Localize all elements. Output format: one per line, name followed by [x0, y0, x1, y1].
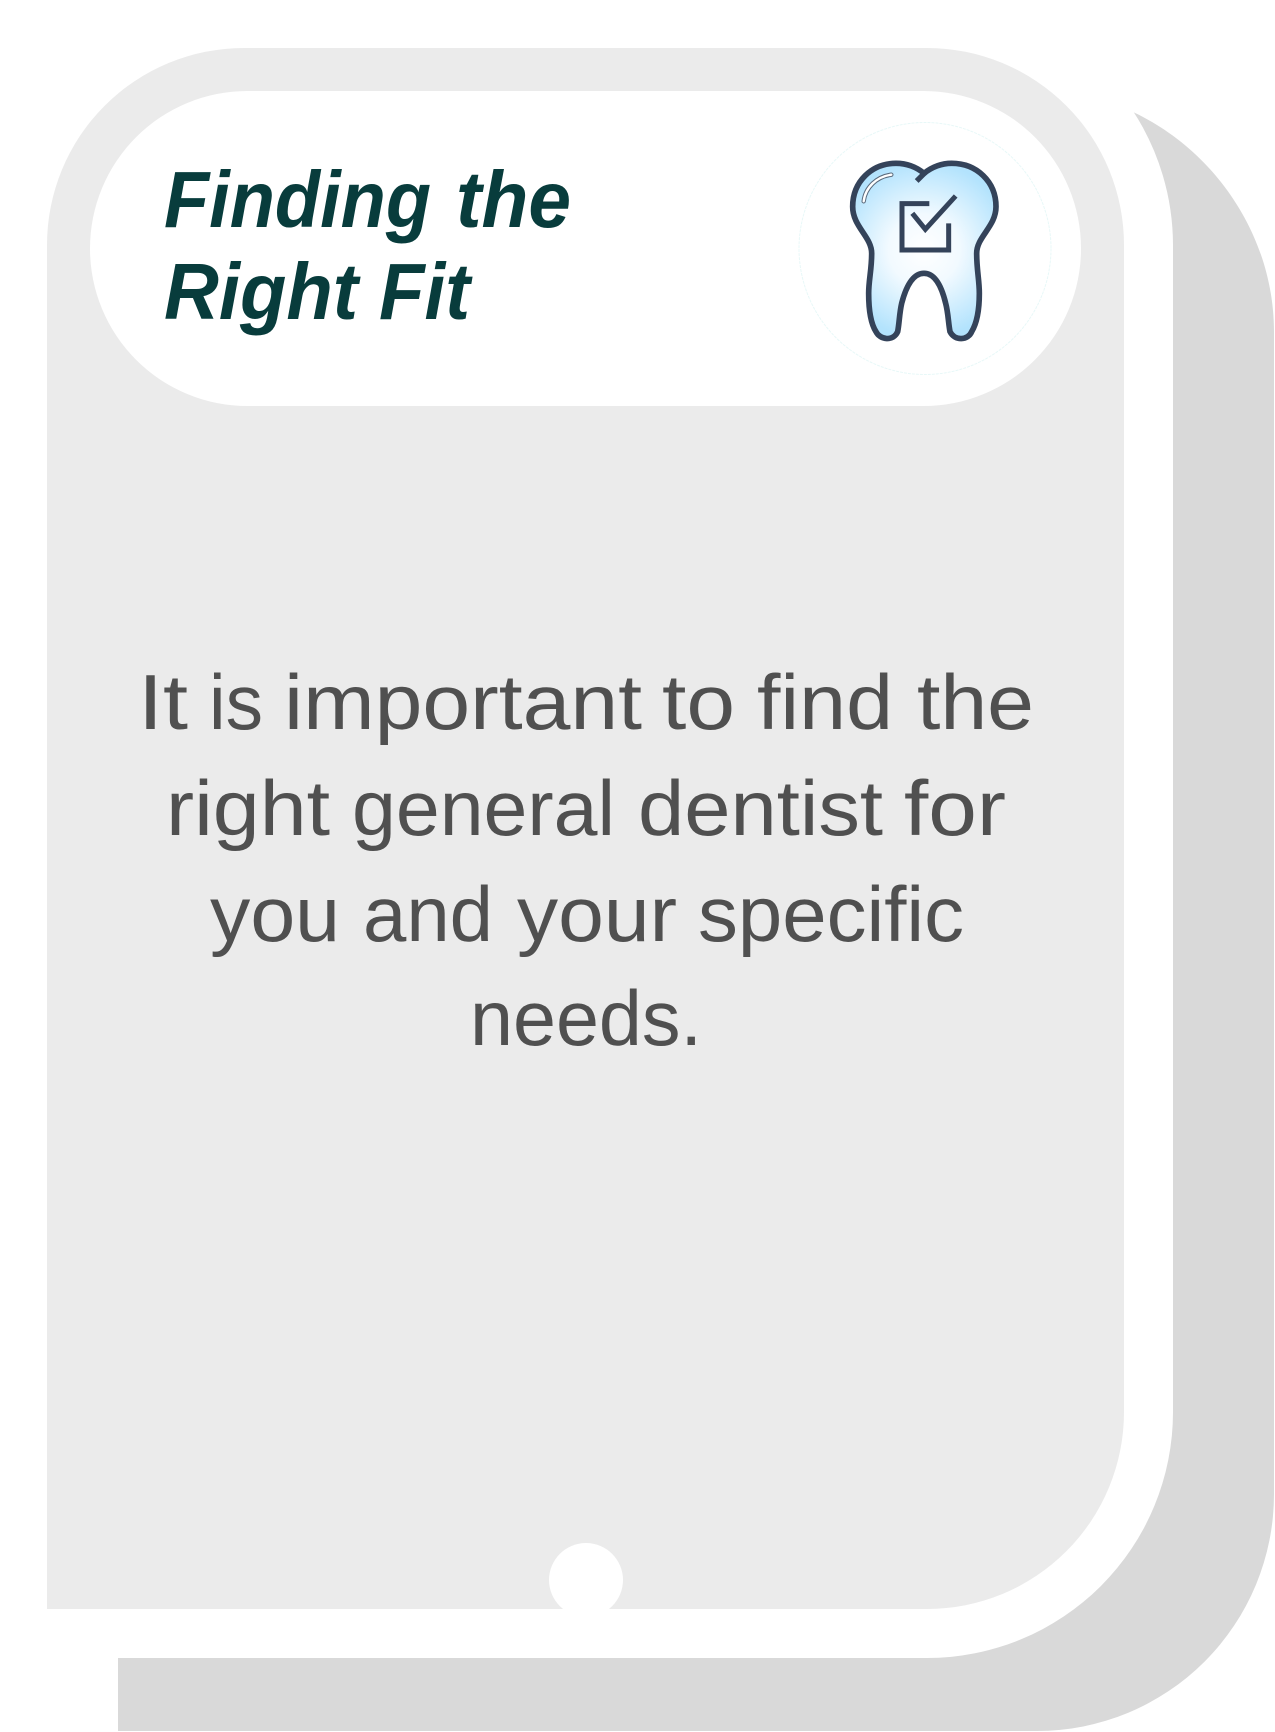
body text: and: [363, 870, 493, 958]
body text: to: [662, 658, 735, 746]
body text: find: [757, 658, 893, 746]
title: Right: [164, 247, 361, 336]
body text: general: [352, 764, 615, 852]
body text: dentist: [638, 764, 883, 852]
body text: needs.: [470, 974, 702, 1062]
body text: [138, 658, 1034, 1062]
title: Fit: [379, 247, 473, 336]
title: the: [456, 155, 571, 244]
body text: It: [138, 658, 188, 746]
body text: the: [917, 658, 1034, 746]
title: [164, 155, 571, 336]
body text: is: [209, 658, 263, 746]
panel bottom hole: [549, 1543, 623, 1617]
body text: for: [904, 764, 1006, 852]
main grey panel: [47, 48, 1124, 1609]
icon ring: [799, 122, 1051, 374]
body text: important: [284, 658, 642, 746]
body text: you: [210, 870, 340, 958]
body text: your: [517, 870, 677, 958]
heading pill: [90, 91, 1081, 406]
icon: tooth with checkmark: [853, 163, 996, 339]
body text: specific: [698, 870, 964, 958]
body text: right: [166, 764, 330, 852]
title: Finding: [164, 155, 431, 244]
